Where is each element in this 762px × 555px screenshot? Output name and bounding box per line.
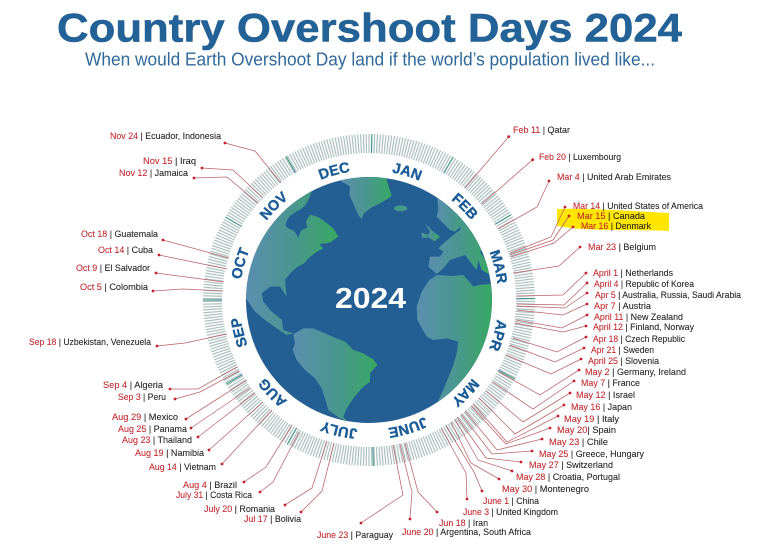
label: Jun 18 Iran [405, 443, 488, 529]
label: June 23 Paraguay: June 23 | Paraguay [317, 530, 393, 541]
label: Nov 24 Ecuador, Indonesia: Nov 24 | Ecuador, Indonesia [110, 131, 222, 142]
label: Oct 18 Guatemala: Oct 18 | Guatemala [81, 229, 159, 240]
highlight: Canada [557, 209, 669, 231]
label: May 25 Greece, Hungary: May 25 | Greece, Hungary [539, 449, 644, 460]
label: Aug 29 Mexico: Aug 29 | Mexico [112, 412, 178, 423]
label: Aug 19 Namibia: Aug 19 | Namibia [135, 448, 205, 459]
label: Nov 15 Iraq [143, 156, 263, 198]
label: April 4 Republic of Korea: April 4 | Republic of Korea [594, 279, 695, 290]
label: July 31 Costa Rica [176, 432, 299, 501]
label: May 27 Switzerland: May 27 | Switzerland [529, 460, 613, 471]
label: Mar 23 Belgium: Mar 23 | Belgium [588, 242, 656, 253]
label: Nov 12 Jamaica: Nov 12 | Jamaica [119, 168, 189, 179]
label: Mar 15 Canada: Mar 15 | Canada [577, 211, 646, 222]
continent: Europe [428, 212, 491, 275]
label: July 20 Romania: July 20 | Romania [204, 504, 276, 515]
month labels: JULY [320, 422, 358, 439]
label: June 1 China [446, 426, 540, 507]
label: Oct 18 Guatemala [81, 229, 229, 258]
label: Aug 25 Panama: Aug 25 | Panama [118, 424, 188, 435]
label: Apr 7 Austria [517, 301, 652, 315]
label: May 7 France: May 7 | France [581, 378, 640, 389]
label: April 11 New Zealand: April 11 | New Zealand [594, 312, 683, 323]
label: Sep 4 Algeria: Sep 4 | Algeria [103, 380, 164, 391]
label: Mar 4 United Arab Emirates: Mar 4 | United Arab Emirates [557, 172, 671, 183]
label: April 25 Slovenia [506, 355, 660, 374]
label: July 20 Romania [204, 441, 327, 515]
label: Oct 14 Cuba [98, 245, 227, 269]
label: Nov 15 Iraq: Nov 15 | Iraq [143, 156, 196, 167]
label: Apr 7 Austria: Apr 7 | Austria [594, 301, 652, 312]
label: June 23 Paraguay [317, 445, 403, 541]
label: May 12 Israel: May 12 | Israel [576, 390, 635, 401]
month labels: DEC [318, 162, 350, 180]
label: Jun 18 Iran: Jun 18 | Iran [439, 518, 488, 529]
month labels: FEB [452, 192, 478, 219]
label: May 20 Spain [471, 406, 616, 444]
label: May 28 Croatia, Portugal: May 28 | Croatia, Portugal [516, 472, 620, 483]
month labels: APR [488, 319, 506, 351]
label: April 25 Slovenia: April 25 | Slovenia [588, 356, 660, 367]
label: Mar 16 Denmark: Mar 16 | Denmark [581, 221, 651, 232]
label: Sep 18 Uzbekistan, Venezuela [29, 334, 227, 348]
label: Sep 3 Peru: Sep 3 | Peru [118, 392, 166, 403]
label: Apr 21 Sweden [510, 345, 654, 362]
label: Apr 18 Czech Republic: Apr 18 | Czech Republic [593, 334, 685, 345]
label: Feb 11 Qatar: Feb 11 | Qatar [513, 125, 570, 136]
label: Apr 5 Australia, Russia, Saudi Arabia: Apr 5 | Australia, Russia, Saudi Arabia [595, 290, 742, 301]
label: May 27 Switzerland [457, 417, 613, 471]
label: Jul 17 Bolivia: Jul 17 | Bolivia [244, 514, 302, 525]
label: May 7 France [493, 378, 640, 409]
label: April 11 New Zealand [516, 312, 683, 328]
continent: Britain [425, 223, 440, 241]
label: June 1 China: June 1 | China [483, 496, 540, 507]
label: Mar 4 United Arab Emirates [498, 172, 671, 229]
label: Sep 18 Uzbekistan, Venezuela: Sep 18 | Uzbekistan, Venezuela [29, 337, 152, 348]
label: May 28 Croatia, Portugal [455, 419, 620, 483]
calendar tick ring [203, 134, 535, 466]
label: Mar 23 Belgium [513, 242, 656, 273]
label: June 3 United Kingdom: June 3 | United Kingdom [463, 507, 558, 518]
label: Oct 14 Cuba: Oct 14 | Cuba [98, 245, 154, 256]
label: Feb 20 Luxembourg: Feb 20 | Luxembourg [539, 152, 621, 163]
label: July 31 Costa Rica: July 31 | Costa Rica [176, 490, 253, 501]
label: Aug 23 Thailand [122, 393, 255, 446]
label: May 30 Montenegro: May 30 | Montenegro [502, 484, 589, 495]
label: May 2 Germany, Ireland: May 2 | Germany, Ireland [585, 367, 686, 378]
label: April 12 Finland, Norway: April 12 | Finland, Norway [593, 322, 694, 333]
label: Aug 14 Vietnam [149, 410, 272, 473]
label: Aug 23 Thailand: Aug 23 | Thailand [122, 435, 192, 446]
label: May 25 Greece, Hungary [461, 414, 644, 460]
label: June 3 United Kingdom [441, 428, 558, 518]
label: April 12 Finland, Norway [515, 322, 694, 333]
label: Sep 4 Algeria [103, 367, 237, 391]
continent: North America [246, 191, 338, 335]
label: Apr 5 Australia, Russia, Saudi Arabia [517, 290, 742, 308]
label: May 16 Japan: May 16 | Japan [571, 402, 632, 413]
month labels: JAN [392, 163, 422, 181]
label: Aug 25 Panama [118, 388, 250, 435]
label: May 12 Israel [486, 390, 635, 422]
label: Mar 15 Canada [510, 211, 646, 255]
label: Jul 17 Bolivia [244, 443, 334, 525]
label: May 16 Japan [479, 398, 632, 434]
month labels: OCT [232, 246, 248, 278]
continent: Iceland [394, 205, 407, 211]
month labels: MAR [490, 250, 507, 284]
label: Oct 9 El Salvador [76, 263, 224, 282]
label: Mar 14 United States of America [510, 201, 704, 253]
month labels: MAY [454, 378, 480, 408]
label: Apr 21 Sweden: Apr 21 | Sweden [591, 345, 654, 356]
label: Apr 18 Czech Republic [513, 334, 685, 352]
label: April 1 Netherlands [517, 268, 673, 296]
globe [246, 177, 492, 423]
label: Nov 12 Jamaica [119, 168, 258, 203]
label: Nov 24 Ecuador, Indonesia [110, 131, 281, 183]
label: Oct 9 El Salvador: Oct 9 | El Salvador [76, 263, 150, 274]
label: Aug 19 Namibia [135, 402, 263, 459]
label: May 2 Germany, Ireland [499, 367, 686, 395]
continent: Greenland [340, 177, 392, 219]
label: Feb 11 Qatar [465, 125, 570, 188]
subtitle: When would Earth Overshoot Day land if the world’s population lived like... [85, 50, 655, 70]
label: Aug 14 Vietnam: Aug 14 | Vietnam [149, 462, 216, 473]
title: Country Overshoot Days 2024 [57, 6, 683, 50]
label: Aug 4 Brazil [183, 425, 292, 491]
label: Aug 29 Mexico [112, 380, 247, 423]
label: May 19 Italy: May 19 | Italy [564, 414, 619, 425]
year label: 2024 [335, 283, 406, 315]
continent: Africa [417, 275, 492, 403]
label: June 20 Argentina, South Africa [400, 444, 532, 538]
month labels: AUG [259, 379, 288, 406]
label: Feb 20 Luxembourg [482, 152, 621, 204]
label: May 30 Montenegro [451, 422, 589, 495]
label: Mar 14 United States of America: Mar 14 | United States of America [573, 201, 704, 212]
label: June 20 Argentina, South Africa: June 20 | Argentina, South Africa [402, 527, 532, 538]
label: May 19 Italy [473, 404, 619, 442]
label: Sep 3 Peru [118, 371, 239, 403]
label: May 23 Chile [465, 411, 608, 450]
month labels: SEP [231, 318, 247, 348]
label: April 4 Republic of Korea [517, 279, 695, 305]
label: May 20 Spain: May 20| Spain [557, 425, 616, 436]
label: Oct 5 Colombia: Oct 5 | Colombia [80, 282, 149, 293]
label: April 1 Netherlands: April 1 | Netherlands [593, 268, 673, 279]
continent: Scandinavia [436, 198, 462, 232]
label: Aug 4 Brazil: Aug 4 | Brazil [183, 480, 237, 491]
label: Mar 16 Denmark [511, 221, 651, 257]
month labels: NOV [259, 190, 286, 220]
continent: South America [293, 328, 377, 421]
month labels: JUNE [388, 418, 426, 438]
continent: Ireland [422, 233, 427, 238]
month labels [231, 162, 507, 439]
label: May 23 Chile: May 23 | Chile [549, 437, 608, 448]
